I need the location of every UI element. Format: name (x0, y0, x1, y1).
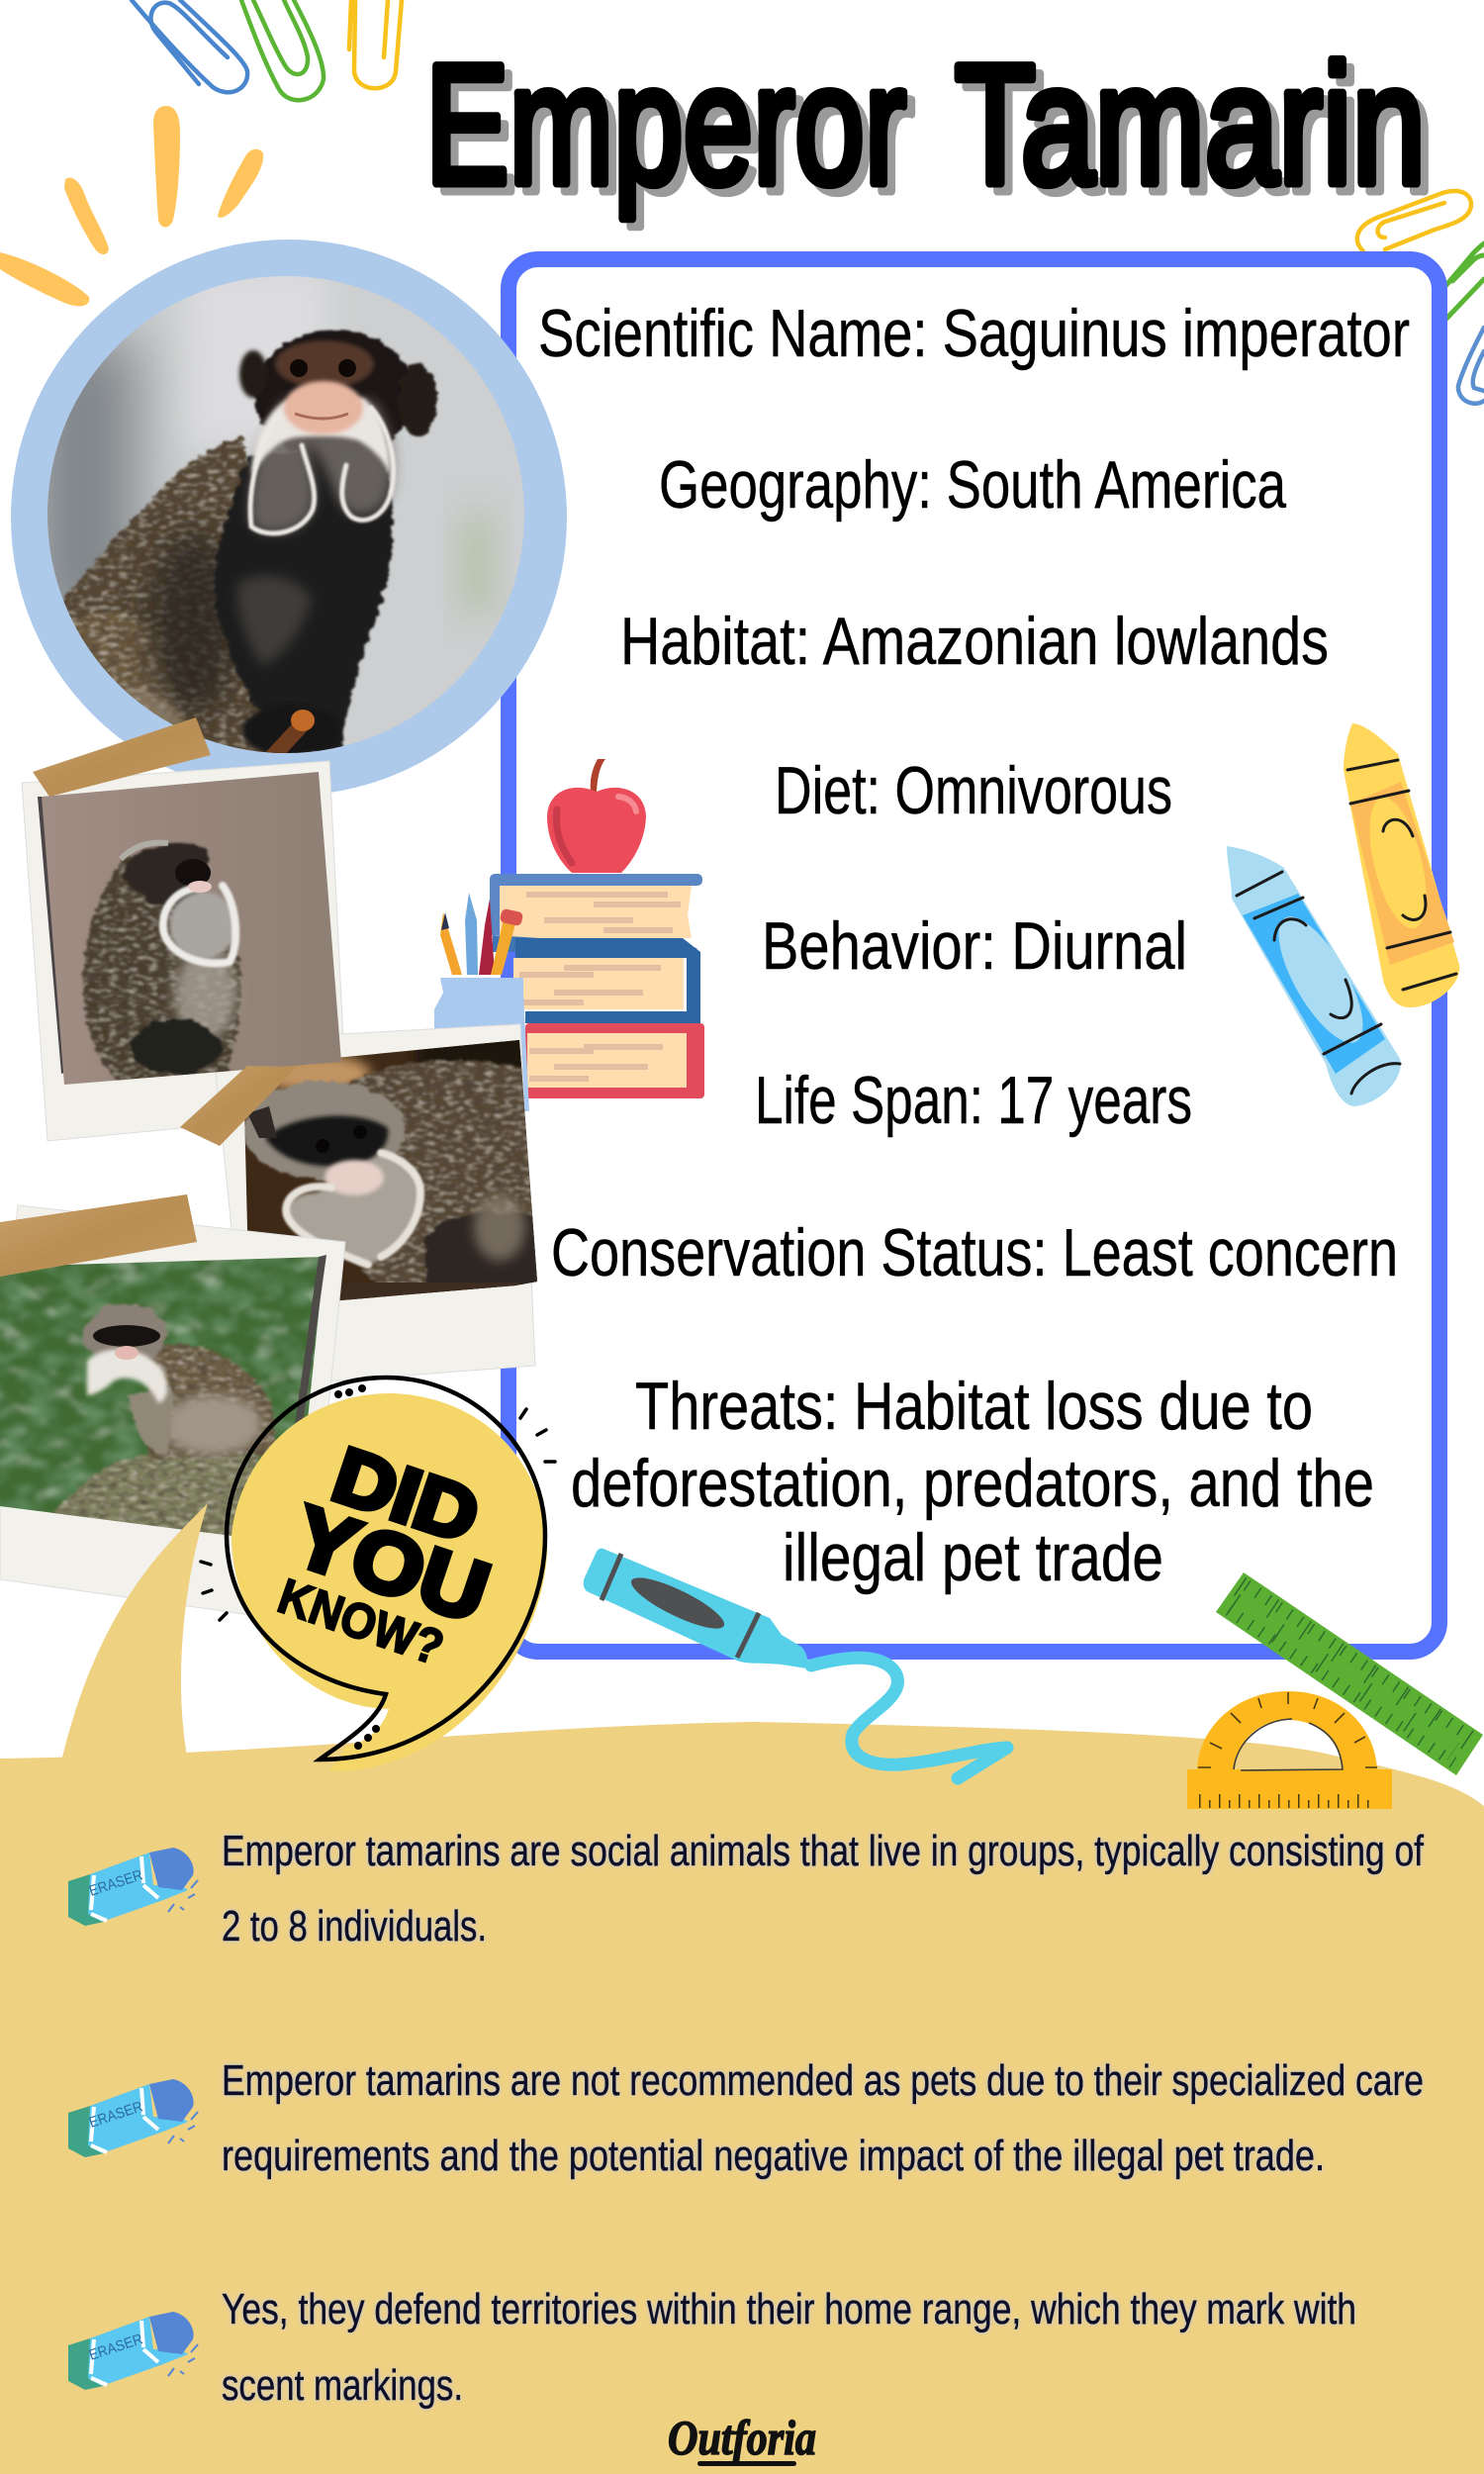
icon: blue paper clip (132, 0, 247, 92)
icon: eraser (68, 1848, 198, 1926)
panel: photo collage (0, 717, 544, 1623)
tamarin moustache (250, 401, 393, 532)
icon: yellow right clip (1357, 191, 1471, 251)
bubble heading (271, 1431, 500, 1675)
icon: blue crayon (1227, 846, 1401, 1106)
tamarin muzzle (284, 381, 363, 434)
fact: geography: Geography: South America (659, 447, 1286, 523)
icon: eraser: ERASER (87, 2331, 145, 2364)
icon: eraser (68, 2079, 198, 2157)
text: fact 3 (222, 2285, 1356, 2410)
background: yellow ground (0, 1722, 1484, 2474)
illustration: books, apple and pencils (434, 759, 704, 1111)
fact: life span: Life Span: 17 years (755, 1063, 1192, 1138)
icon: green right clip (1446, 243, 1484, 319)
icon: bottom red book (525, 1023, 704, 1098)
title (425, 30, 1434, 228)
fact: habitat: Habitat: Amazonian lowlands (620, 604, 1329, 679)
tape 1 (33, 717, 211, 797)
icon: green paper clip (241, 0, 324, 100)
fact: behavior: Behavior: Diurnal (762, 908, 1187, 984)
photo 2: tamarin close-up (244, 1040, 537, 1300)
icon: yellow crayon (1344, 723, 1459, 1007)
facts text block (538, 296, 1410, 1595)
panel: facts frame (509, 259, 1439, 1652)
icon: yellow sun rays (0, 106, 263, 306)
bubble heading: DID (324, 1431, 490, 1560)
text: fact 1: 2 to 8 individuals. (222, 1902, 487, 1951)
fact: threats: Threats: Habitat loss due to (635, 1369, 1313, 1444)
title: Emperor (425, 30, 906, 220)
bubble heading: KNOW? (271, 1568, 450, 1675)
icon: yellow protractor (1187, 1691, 1392, 1809)
fact: threats (571, 1369, 1374, 1595)
icon: paper clips top right (1357, 191, 1484, 404)
text: fact 2 (222, 2056, 1424, 2180)
bubble dots and ticks (201, 1384, 555, 1750)
polaroid frame 1 (22, 761, 344, 1141)
tape 3 (0, 1194, 197, 1277)
icon: eraser (68, 2312, 198, 2390)
icon: paper clips top left (132, 0, 402, 100)
photo 1: tamarin on taupe background (38, 772, 341, 1089)
icon: apple (547, 759, 646, 873)
bubble fill (232, 1393, 547, 1771)
tape 2 (180, 1066, 297, 1146)
bubble outline (227, 1378, 545, 1760)
facts section: fact 1 (68, 1827, 1425, 1951)
callout: did you know bubble (201, 1378, 555, 1771)
photo 3: tamarin on rock (0, 1257, 321, 1536)
icon: top blue book (490, 874, 702, 952)
text: fact 1 (222, 1827, 1425, 1951)
speech bubble tail (61, 1503, 208, 1761)
polaroid frame 2 (213, 1024, 535, 1387)
tamarin body (49, 435, 317, 767)
tamarin head (253, 331, 416, 457)
bubble heading: YOU (282, 1488, 500, 1641)
photo: main tamarin in blue circle (11, 239, 567, 796)
icon: yellow paper clip (349, 0, 402, 88)
icon: pencil cup and pencils (434, 893, 529, 1111)
icon: blue wax crayon with squiggle (584, 1549, 1007, 1778)
icon: middle dark blue book (513, 938, 700, 1023)
fact: diet: Diet: Omnivorous (775, 753, 1172, 828)
polaroid frame 3 (0, 1205, 345, 1623)
facts section: fact 2 (68, 2056, 1424, 2180)
icon: blue right clip (1458, 328, 1484, 404)
icon: eraser: ERASER (87, 1866, 145, 1900)
logo: Outforia: Outforia (668, 2410, 816, 2465)
title: Emperor (433, 38, 914, 228)
tamarin hand and stick (242, 705, 341, 756)
fact: threats: illegal pet trade (783, 1520, 1163, 1595)
icon: eraser: ERASER (87, 2098, 145, 2132)
icon: green ruler (1216, 1572, 1483, 1775)
text: fact 3: scent markings. (222, 2361, 463, 2410)
facts section: fact 3 (68, 2285, 1356, 2410)
